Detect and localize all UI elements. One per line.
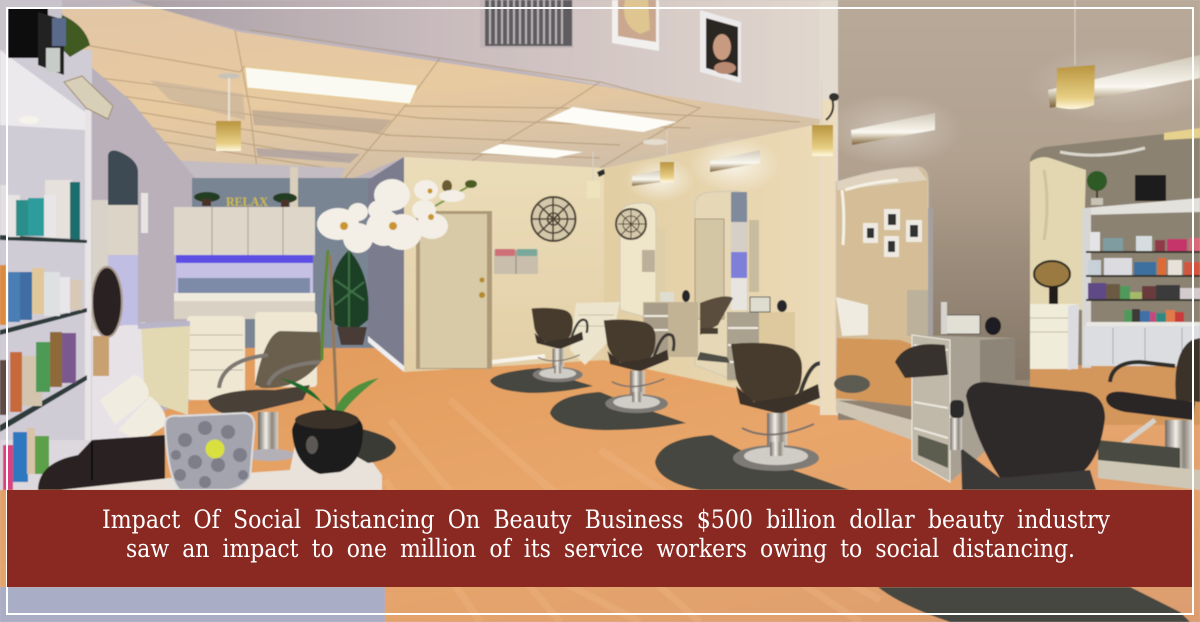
hair dryer in mirror bbox=[1034, 261, 1070, 304]
small plants on cabinet bbox=[194, 192, 297, 207]
background fill bbox=[0, 0, 1200, 340]
salon chair three bbox=[731, 343, 827, 471]
mirrored station bbox=[895, 302, 1015, 482]
pendant lamp: top right bbox=[1056, 0, 1095, 109]
wall shelf unit with products bbox=[1082, 198, 1200, 368]
salon chair one bbox=[532, 308, 587, 382]
sconce: top right bbox=[1048, 55, 1200, 108]
black speaker and fern, top left bbox=[0, 0, 90, 75]
sconce: centre right bbox=[851, 113, 935, 145]
upper soffit wall bbox=[130, 0, 838, 122]
air vent bbox=[480, 0, 573, 48]
product bottles, bottom row bbox=[3, 428, 49, 490]
salon chair two bbox=[604, 320, 674, 413]
back wall: blue grey bbox=[192, 178, 377, 348]
shadow on wall between mirrors bbox=[930, 160, 1030, 380]
mirror bottom baseboard bbox=[836, 400, 912, 440]
right cream wall bbox=[604, 120, 838, 410]
side wall near door bbox=[368, 157, 404, 372]
right wall glows bbox=[823, 45, 1200, 166]
lower left light panel bbox=[90, 322, 145, 445]
door bbox=[416, 211, 492, 369]
light glows on wall bbox=[625, 137, 780, 202]
pendant lamp: centre right bbox=[812, 80, 839, 156]
small potted tree bbox=[1087, 171, 1107, 205]
lower left reflective counter bbox=[0, 587, 385, 622]
wall clock bbox=[532, 197, 576, 241]
black ceramic pot bbox=[292, 410, 363, 474]
white bench in mirror bbox=[1030, 304, 1079, 370]
security camera bbox=[597, 169, 605, 177]
left mirror with reflection bbox=[834, 167, 933, 408]
white chair at back bbox=[570, 302, 620, 365]
wall light, top left bbox=[64, 76, 113, 119]
reflected and styling stations bbox=[643, 290, 795, 382]
floor of left corner bbox=[0, 440, 100, 490]
front salon chair bbox=[208, 331, 322, 461]
black box on shelf bbox=[1135, 175, 1166, 201]
reflected chair in right mirror bbox=[1098, 338, 1200, 490]
wash station cabinets and glow bbox=[174, 207, 315, 319]
orchid plant bbox=[279, 179, 477, 417]
white footrest cushions bbox=[100, 374, 166, 442]
left mirror panel bbox=[92, 151, 148, 330]
ceiling lights bbox=[245, 67, 677, 158]
wall sconces: middle bbox=[632, 150, 760, 186]
caption banner bbox=[7, 490, 1192, 587]
mirror one bbox=[616, 203, 666, 320]
floor mats bbox=[490, 368, 1190, 622]
wall magazine rack bbox=[494, 249, 538, 274]
foreground black chair bbox=[950, 382, 1105, 490]
caption line two: saw an impact to one million of its service workers owing to social distancing. bbox=[126, 534, 1075, 563]
framed portrait: blonde bbox=[612, 0, 659, 51]
side cabinet bbox=[138, 321, 190, 415]
right mirror with salon reflection bbox=[1030, 128, 1200, 425]
framed portrait: brunette bbox=[700, 10, 741, 83]
RELAX sign: RELAX bbox=[226, 194, 269, 209]
tall potted palm bbox=[329, 250, 369, 345]
round mat behind front chair bbox=[345, 429, 396, 463]
background floor bbox=[0, 340, 1200, 622]
pendant lamp: left bbox=[216, 73, 241, 151]
left side wall bbox=[85, 62, 195, 440]
ceiling tiles bbox=[60, 6, 838, 184]
mirror two bbox=[695, 191, 759, 385]
pendant lamps: middle bbox=[587, 130, 674, 198]
counter and black sofa bbox=[38, 435, 382, 490]
left product shelves bbox=[0, 50, 92, 445]
right taupe wall bbox=[838, 0, 1200, 420]
glass bowl of silver candies bbox=[165, 413, 254, 490]
hair dryer hood bbox=[92, 267, 122, 376]
floor plank highlights bbox=[385, 400, 880, 622]
shampoo chairs bbox=[187, 312, 317, 400]
cream wall with door bbox=[404, 157, 604, 372]
